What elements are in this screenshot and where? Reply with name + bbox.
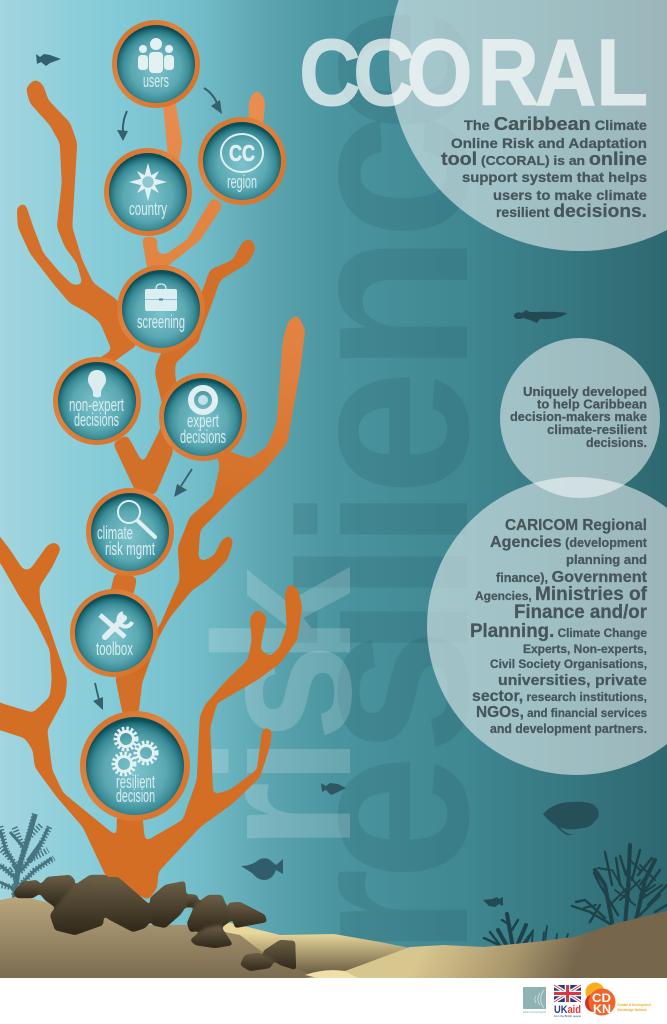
plant: right dark branches bbox=[572, 845, 667, 925]
logo: UK aid: UKaid bbox=[554, 1004, 581, 1016]
label: non-expert decisions bbox=[69, 395, 124, 430]
plant: left sea fan bbox=[0, 813, 54, 900]
label: resilient decision: resilient bbox=[116, 772, 155, 792]
node: expert decisions bbox=[159, 373, 247, 461]
arrow: users to country bbox=[117, 111, 128, 141]
audience text: Agencies, Ministries of bbox=[475, 584, 648, 605]
label: non-expert decisions: decisions bbox=[74, 410, 119, 430]
label: climate risk mgmt: climate bbox=[97, 523, 133, 543]
uniquely developed text: climate-resilient bbox=[547, 423, 648, 437]
intro text: The Caribbean Climate bbox=[464, 113, 648, 134]
node: users bbox=[112, 20, 200, 108]
uniquely developed text: to help Caribbean bbox=[537, 398, 647, 412]
infographic: Caribbean Community Climate Change Centre bbox=[523, 1010, 546, 1014]
sand: pale dune tip bbox=[305, 970, 358, 978]
logo: CDKN: CD bbox=[592, 991, 611, 1005]
icon: tools bbox=[100, 613, 132, 637]
label: resilient decision bbox=[116, 772, 155, 806]
intro text: resilient decisions. bbox=[496, 200, 647, 221]
uniquely developed text bbox=[510, 385, 648, 450]
logo: UK aid bbox=[554, 985, 581, 1018]
footer white band bbox=[0, 978, 667, 1024]
intro text: tool (CCORAL) is an online bbox=[441, 148, 647, 169]
arrow: toolbox to resilient decision bbox=[93, 683, 103, 710]
fish: pike bbox=[514, 310, 567, 323]
audience text: NGOs, and financial services bbox=[476, 704, 647, 721]
logo: UK aid: from the British people bbox=[554, 1014, 581, 1018]
uniquely developed text: decisions. bbox=[586, 436, 647, 450]
audience text: planning and bbox=[566, 553, 647, 567]
icon: compass sun bbox=[129, 163, 167, 201]
uniquely developed text: Uniquely developed bbox=[523, 385, 647, 399]
coral tree bbox=[0, 79, 305, 900]
audience text: sector, research institutions, bbox=[472, 688, 647, 705]
label: climate risk mgmt bbox=[97, 523, 155, 559]
node: region bbox=[198, 117, 286, 205]
audience text: and development partners. bbox=[490, 722, 647, 736]
intro text: users to make climate bbox=[493, 188, 648, 203]
logo: CDKN bbox=[585, 982, 652, 1016]
uniquely developed text: decision-makers make bbox=[510, 410, 647, 424]
title: CCORAL bbox=[299, 20, 648, 126]
fish: large bbox=[543, 802, 599, 835]
sand: right dune bbox=[305, 911, 667, 978]
audience text: Planning. Climate Change bbox=[470, 621, 647, 642]
watermark word: risk: risk bbox=[174, 566, 392, 850]
audience text: universities, private bbox=[498, 672, 647, 689]
logo: climate centre bbox=[523, 987, 546, 1014]
label: non-expert decisions: non-expert bbox=[69, 395, 124, 415]
node: country bbox=[104, 148, 192, 236]
node: resilient decision bbox=[80, 711, 190, 821]
rocks bbox=[13, 875, 296, 971]
intro text: support system that helps bbox=[462, 170, 647, 185]
watermark word: resilience: resilience bbox=[250, 7, 518, 957]
icon: light bulb bbox=[88, 370, 106, 398]
label: country: country bbox=[129, 199, 167, 219]
sand: left dune bbox=[0, 896, 330, 978]
intro text: Online Risk and Adaptation bbox=[451, 136, 647, 151]
label: expert decisions bbox=[180, 411, 226, 447]
node: non-expert decisions bbox=[53, 357, 141, 445]
audience text: Agencies (development bbox=[490, 534, 648, 551]
sand: back dune bbox=[190, 915, 430, 978]
audience text: finance), Government bbox=[496, 569, 648, 586]
fish: top left bbox=[36, 54, 61, 66]
info circle: intro bbox=[389, 0, 667, 251]
fish: centre bbox=[321, 783, 346, 795]
intro text bbox=[441, 113, 648, 221]
label: resilient decision: decision bbox=[116, 786, 155, 806]
label: expert decisions: expert bbox=[187, 411, 219, 431]
fish: small bbox=[483, 897, 503, 907]
node: toolbox bbox=[70, 589, 158, 677]
arrow: users to region bbox=[204, 88, 222, 114]
label: screening: screening bbox=[137, 312, 185, 332]
logo: CDKN: Knowledge Network bbox=[617, 1008, 647, 1012]
logo: CDKN: KN bbox=[593, 1002, 611, 1016]
icon: CC logo: CC bbox=[229, 140, 255, 166]
icon: magnifying glass bbox=[118, 501, 155, 537]
audience text: CARICOM Regional bbox=[505, 517, 647, 534]
fish: lower left bbox=[241, 858, 283, 880]
icon: briefcase bbox=[145, 284, 177, 311]
plant: small dark seaweed bbox=[484, 914, 568, 948]
node: climate risk management bbox=[86, 488, 174, 576]
arrow: expert to climate risk bbox=[174, 469, 192, 497]
icon: users bbox=[138, 38, 174, 73]
audience text: Civil Society Organisations, bbox=[490, 657, 647, 671]
label: toolbox: toolbox bbox=[96, 639, 133, 659]
icon: gears bbox=[114, 728, 156, 774]
label: climate risk mgmt: risk mgmt bbox=[105, 539, 155, 559]
label: expert decisions: decisions bbox=[180, 427, 226, 447]
info circle: uniquely developed bbox=[500, 338, 660, 498]
label: users: users bbox=[143, 71, 169, 91]
audience text bbox=[470, 517, 648, 736]
info circle: audience bbox=[427, 477, 667, 775]
icon: target bbox=[191, 388, 215, 412]
logo: CDKN: Climate & Development bbox=[617, 1003, 652, 1007]
audience text: Finance and/or bbox=[514, 602, 648, 623]
audience text: Experts, Non-experts, bbox=[523, 642, 647, 656]
label: region: region bbox=[227, 172, 257, 192]
node: screening bbox=[117, 265, 205, 353]
